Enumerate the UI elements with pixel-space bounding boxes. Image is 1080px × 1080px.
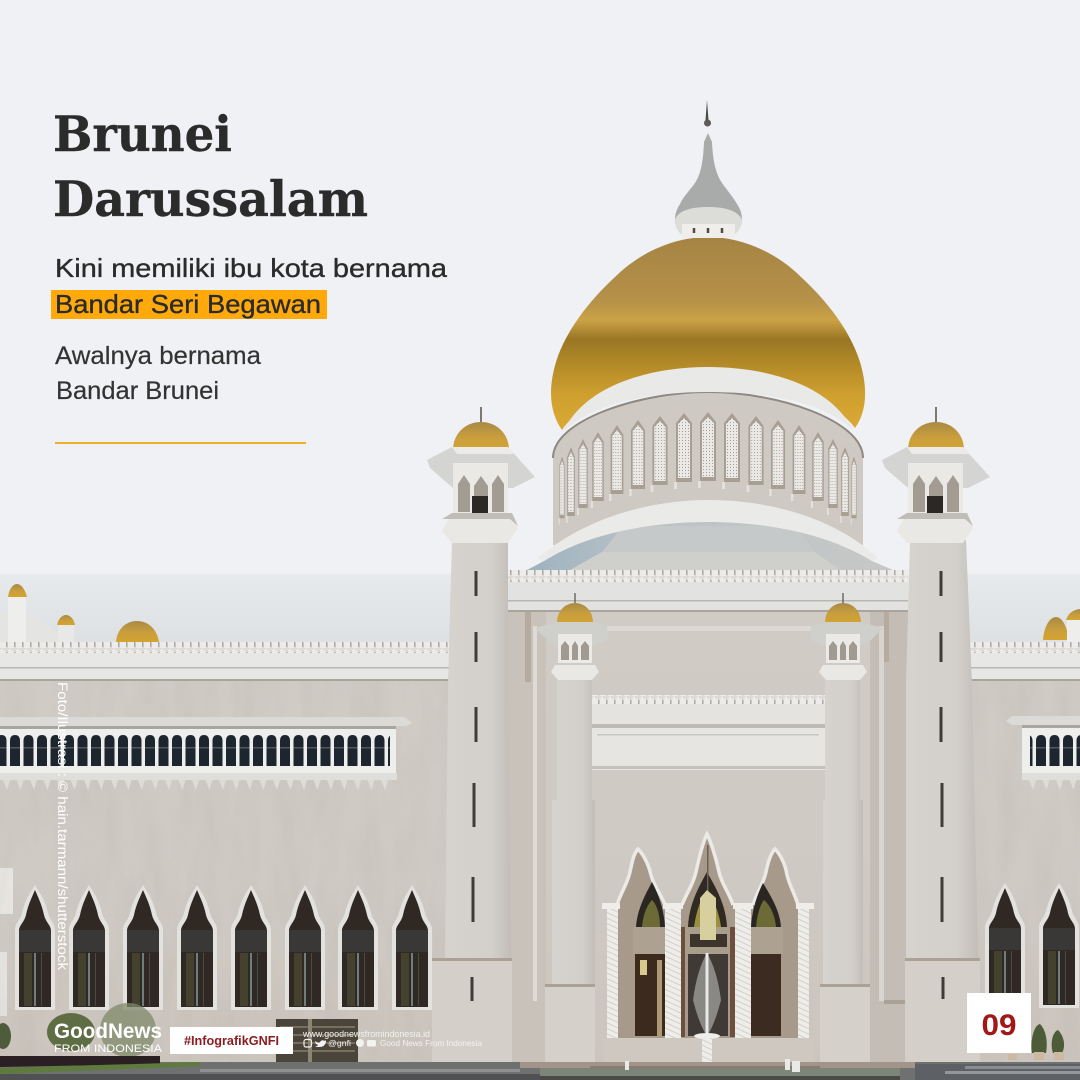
text: former name: Awalnya bernama bbox=[55, 342, 261, 370]
photo: grey stepped roof below the drum bbox=[527, 522, 893, 570]
photo: left wing lower arched windows bbox=[15, 885, 432, 1010]
title bbox=[53, 105, 368, 228]
logo: GoodNews from Indonesia: GoodNews bbox=[54, 1020, 162, 1043]
photo: right main minaret bbox=[882, 407, 990, 1062]
website and social handles: Good News From Indonesia bbox=[380, 1038, 482, 1048]
photo: left wing arcade window band bbox=[0, 717, 412, 790]
drum lattice windows bbox=[559, 412, 857, 525]
title: Darussalam bbox=[53, 170, 368, 228]
photo: right side potted plants bbox=[1008, 1024, 1064, 1060]
photo: right wing rooftop dome and turret bbox=[1043, 609, 1080, 642]
twisted columns bbox=[602, 903, 814, 1038]
logo: GoodNews from Indonesia: FROM INDONESIA bbox=[54, 1043, 163, 1055]
title: Brunei bbox=[53, 105, 232, 163]
photo: main drum of the dome bbox=[553, 392, 863, 545]
minaret slit windows bbox=[472, 571, 476, 1001]
photo: left wing rooftop domes and turrets bbox=[0, 584, 159, 645]
stained glass transoms bbox=[636, 872, 781, 927]
photo: garden shrubs hedge and lawn bbox=[0, 1003, 200, 1074]
photo: plaster texture overlay bbox=[0, 680, 1080, 1060]
photo: dome finial spire bbox=[675, 100, 742, 238]
minaret slit windows bbox=[941, 571, 943, 999]
subtitle: capital name intro: Kini memiliki ibu kota bernama bbox=[55, 253, 448, 283]
photo: small fountain jets bbox=[625, 1059, 800, 1072]
hashtag tag: #InfografikGNFI bbox=[184, 1033, 279, 1048]
hashtag tag bbox=[170, 1027, 293, 1054]
photo: wooden bench screen bbox=[276, 1019, 358, 1062]
icon: instagram bbox=[304, 1040, 312, 1047]
photo: left wing wall bbox=[0, 642, 450, 1065]
arch recesses bbox=[617, 834, 798, 1040]
logo: GoodNews from Indonesia bbox=[54, 1020, 163, 1055]
photo: left inner minaret bbox=[535, 593, 608, 1062]
photo: left main minaret bbox=[427, 407, 535, 1062]
inner doors bbox=[633, 927, 783, 1037]
icon: twitter bbox=[315, 1040, 326, 1047]
website and social handles: @gnfi bbox=[328, 1038, 351, 1048]
photo: central triple-arch entrance bbox=[602, 834, 814, 1072]
photo: right inner minaret bbox=[810, 593, 883, 1062]
hanging lantern bbox=[700, 845, 716, 940]
website and social handles bbox=[302, 1029, 482, 1048]
photo: lower white ring on the drum bbox=[538, 500, 878, 561]
photo: central white frieze panel bbox=[591, 695, 825, 770]
entrance plinth bbox=[604, 1038, 814, 1062]
photo: left edge white column bbox=[0, 868, 13, 1016]
icon: facebook bbox=[356, 1039, 364, 1047]
highlight: capital name: Bandar Seri Begawan bbox=[55, 289, 321, 319]
website and social handles: www.goodnewsfromindonesia.id bbox=[302, 1029, 430, 1039]
photo: golden main dome bbox=[551, 237, 865, 430]
photo: sky band bbox=[0, 574, 1080, 654]
photo: right wing wall bbox=[968, 642, 1080, 1065]
accent divider line bbox=[55, 442, 306, 444]
fountain bbox=[693, 953, 721, 1072]
text: former name: Bandar Brunei bbox=[56, 377, 219, 405]
photo: pavement and pool bbox=[0, 1062, 1080, 1080]
icon: youtube bbox=[367, 1040, 376, 1046]
page number badge bbox=[967, 993, 1031, 1053]
photo: right wing lower arched windows bbox=[985, 883, 1079, 1008]
photo: white ring under the dome bbox=[563, 367, 853, 432]
page number badge: 09 bbox=[982, 1009, 1016, 1042]
text: former name bbox=[55, 342, 261, 405]
photo: central block of the mosque bbox=[508, 570, 908, 1065]
photo: right wing arcade window band bbox=[1006, 716, 1080, 789]
photo credit: Foto/Ilustrasi : © hain.tarmann/shutterstock bbox=[55, 682, 70, 970]
